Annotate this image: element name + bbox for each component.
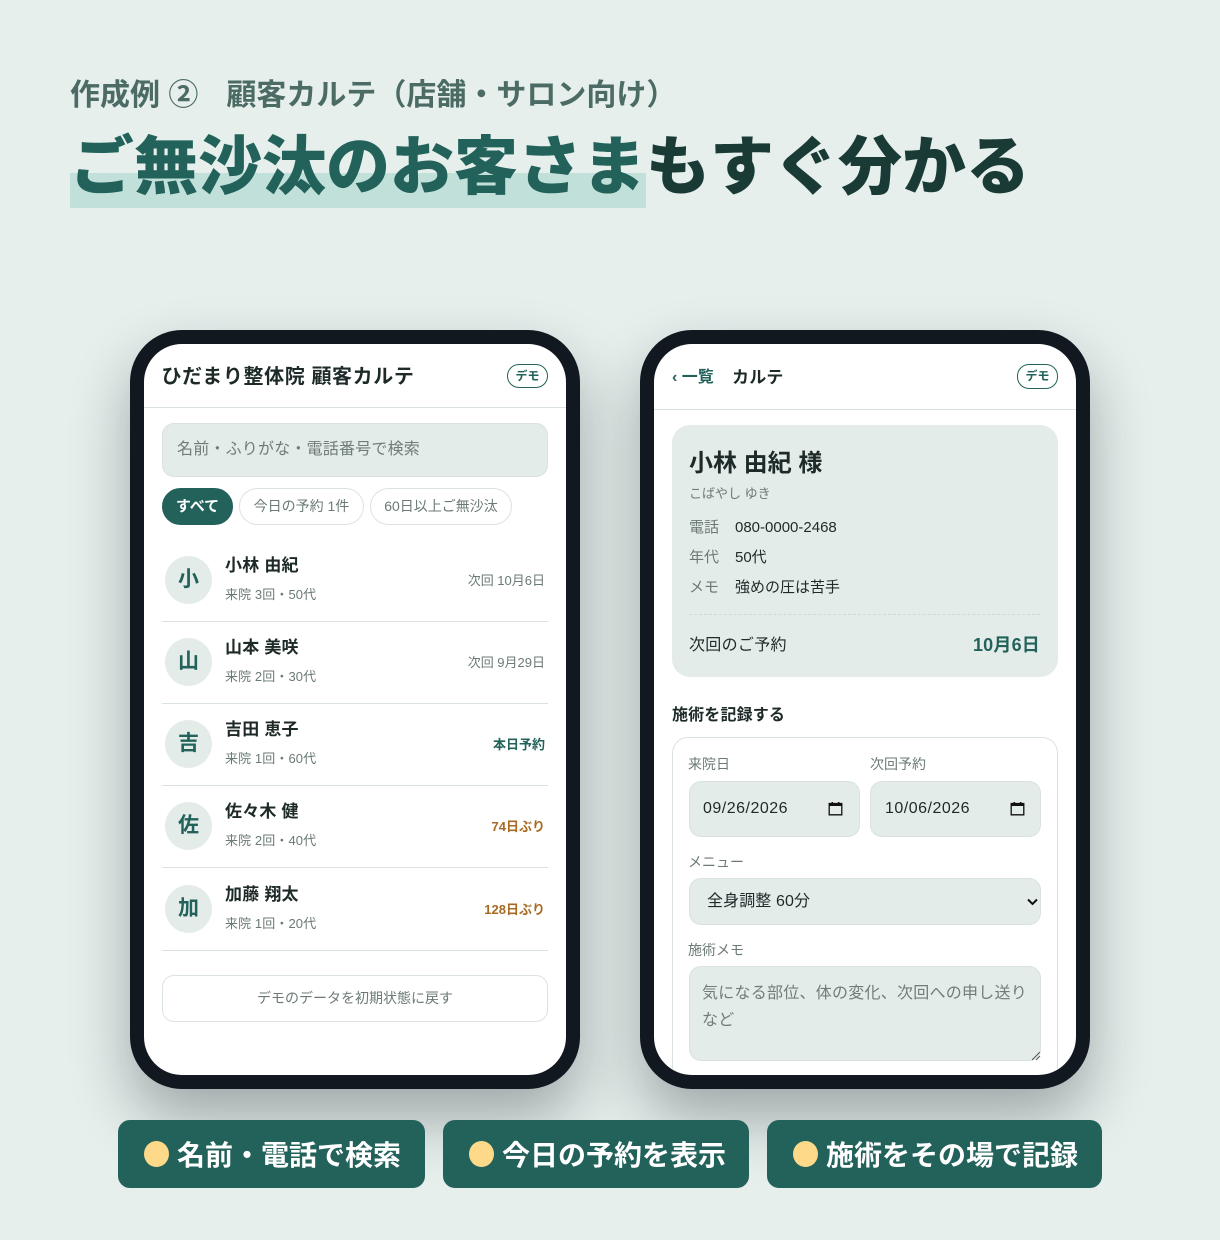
- screen title: カルテ: [732, 368, 784, 387]
- search box: [162, 423, 548, 477]
- customer row: 加藤: 加: [178, 897, 199, 920]
- feature badge: search: [118, 1120, 425, 1188]
- customer row: 加藤: 来院 1回・20代: [225, 916, 316, 931]
- filter chip: today: 今日の予約 1件: [254, 498, 349, 514]
- customer row: 山本: 山: [178, 650, 199, 673]
- kana: こばやし ゆき: [689, 486, 771, 501]
- record form: [672, 737, 1058, 1137]
- filter chip: today: [239, 488, 364, 525]
- customer row: 小林: 次回 10月6日: [468, 573, 545, 588]
- feature badge: today: 今日の予約を表示: [502, 1140, 726, 1171]
- demo badge: デモ: [1025, 369, 1050, 383]
- menu select: 全身調整 60分: [707, 893, 810, 910]
- customer row: 山本: 次回 9月29日: [468, 655, 545, 670]
- subtitle: 作成例 ② 顧客カルテ（店舗・サロン向け）: [70, 79, 676, 112]
- customer card: [672, 425, 1058, 677]
- icon: resize grip: [1032, 1052, 1040, 1060]
- title with highlight: [70, 131, 1030, 208]
- customer row: 吉田: 来院 1回・60代: [225, 751, 316, 766]
- feature badge: record: 施術をその場で記録: [826, 1140, 1078, 1171]
- customer row: 小林: 来院 3回・50代: [225, 587, 316, 602]
- filter chip: all: すべて: [176, 498, 219, 515]
- app title: ひだまり整体院 顧客カルテ: [162, 366, 414, 388]
- record screen: [654, 344, 1076, 1075]
- visit date label: 来院日: [688, 756, 730, 772]
- filter chip: 60 days: [370, 488, 512, 525]
- feature badge: today: [443, 1120, 749, 1188]
- age row: 50代: [735, 549, 767, 566]
- icon: calendar: [828, 802, 842, 816]
- customer row: 佐々木: 来院 2回・40代: [225, 833, 316, 848]
- list screen: [144, 344, 566, 1075]
- customer row: 小林: [162, 540, 548, 622]
- next reservation date: 10月6日: [973, 635, 1040, 655]
- customer row: 佐々木: 佐々木 健: [225, 802, 299, 821]
- icon: chevron: [1027, 898, 1038, 906]
- customer row: 加藤: 128日ぶり: [484, 902, 545, 917]
- customer row: 佐々木: 74日ぶり: [492, 819, 545, 834]
- title text: ご無沙汰のお客さまもすぐ分かる: [70, 131, 1030, 203]
- form heading: 施術を記録する: [672, 707, 785, 724]
- customer row: 佐々木: [162, 786, 548, 868]
- next reservation label: 次回のご予約: [689, 637, 787, 654]
- treatment memo label: 施術メモ: [688, 942, 744, 958]
- memo row: 強めの圧は苦手: [735, 579, 840, 596]
- icon: calendar: [1010, 802, 1024, 816]
- customer row: 吉田: 本日予約: [493, 737, 545, 752]
- feature badge: search: 名前・電話で検索: [177, 1140, 401, 1171]
- customer row: 小林: 小林 由紀: [225, 556, 299, 575]
- reset button: デモのデータを初期状態に戻す: [257, 990, 453, 1006]
- customer row: 加藤: [162, 869, 548, 951]
- search placeholder: 名前・ふりがな・電話番号で検索: [177, 441, 420, 458]
- next date input: 10/06/2026: [885, 800, 970, 817]
- phone: customer record: [640, 330, 1090, 1089]
- customer row: 山本: 来院 2回・30代: [225, 669, 316, 684]
- menu select: [689, 878, 1041, 925]
- filter chip: 60 days: 60日以上ご無沙汰: [384, 498, 498, 514]
- visit date input: [689, 781, 860, 837]
- customer row: 佐々木: 佐: [178, 814, 199, 837]
- demo badge: [1017, 364, 1058, 389]
- customer name: 小林 由紀 様: [689, 450, 822, 477]
- next date label: 次回予約: [870, 756, 926, 772]
- back link: ‹ 一覧: [672, 369, 714, 386]
- demo badge: [507, 364, 548, 388]
- customer row: 吉田: 吉田 恵子: [225, 720, 299, 739]
- customer row: 山本: 山本 美咲: [225, 638, 299, 657]
- phone row: [689, 519, 837, 536]
- visit date input: 09/26/2026: [703, 800, 788, 817]
- age row: [689, 549, 767, 566]
- feature badge: record: [767, 1120, 1102, 1188]
- age row: 年代: [689, 549, 719, 566]
- customer row: 加藤: 加藤 翔太: [225, 885, 299, 904]
- customer row: 吉田: 吉: [178, 732, 199, 755]
- treatment memo textarea: 気になる部位、体の変化、次回への申し送りなど: [702, 985, 1027, 1029]
- memo row: [689, 579, 840, 596]
- title highlight band: [70, 173, 646, 208]
- demo badge: デモ: [515, 369, 540, 383]
- phone: customer list: [130, 330, 580, 1089]
- memo row: メモ: [689, 579, 719, 596]
- menu label: メニュー: [688, 854, 744, 870]
- customer row: 山本: [162, 622, 548, 704]
- filter chip: all: [162, 488, 233, 525]
- customer row: 小林: 小: [178, 568, 199, 591]
- reset button: [162, 975, 548, 1022]
- treatment memo textarea: [689, 966, 1041, 1061]
- next date input: [870, 781, 1041, 837]
- phone row: 電話: [689, 519, 719, 536]
- phone row: 080-0000-2468: [735, 519, 837, 536]
- customer row: 吉田: [162, 704, 548, 786]
